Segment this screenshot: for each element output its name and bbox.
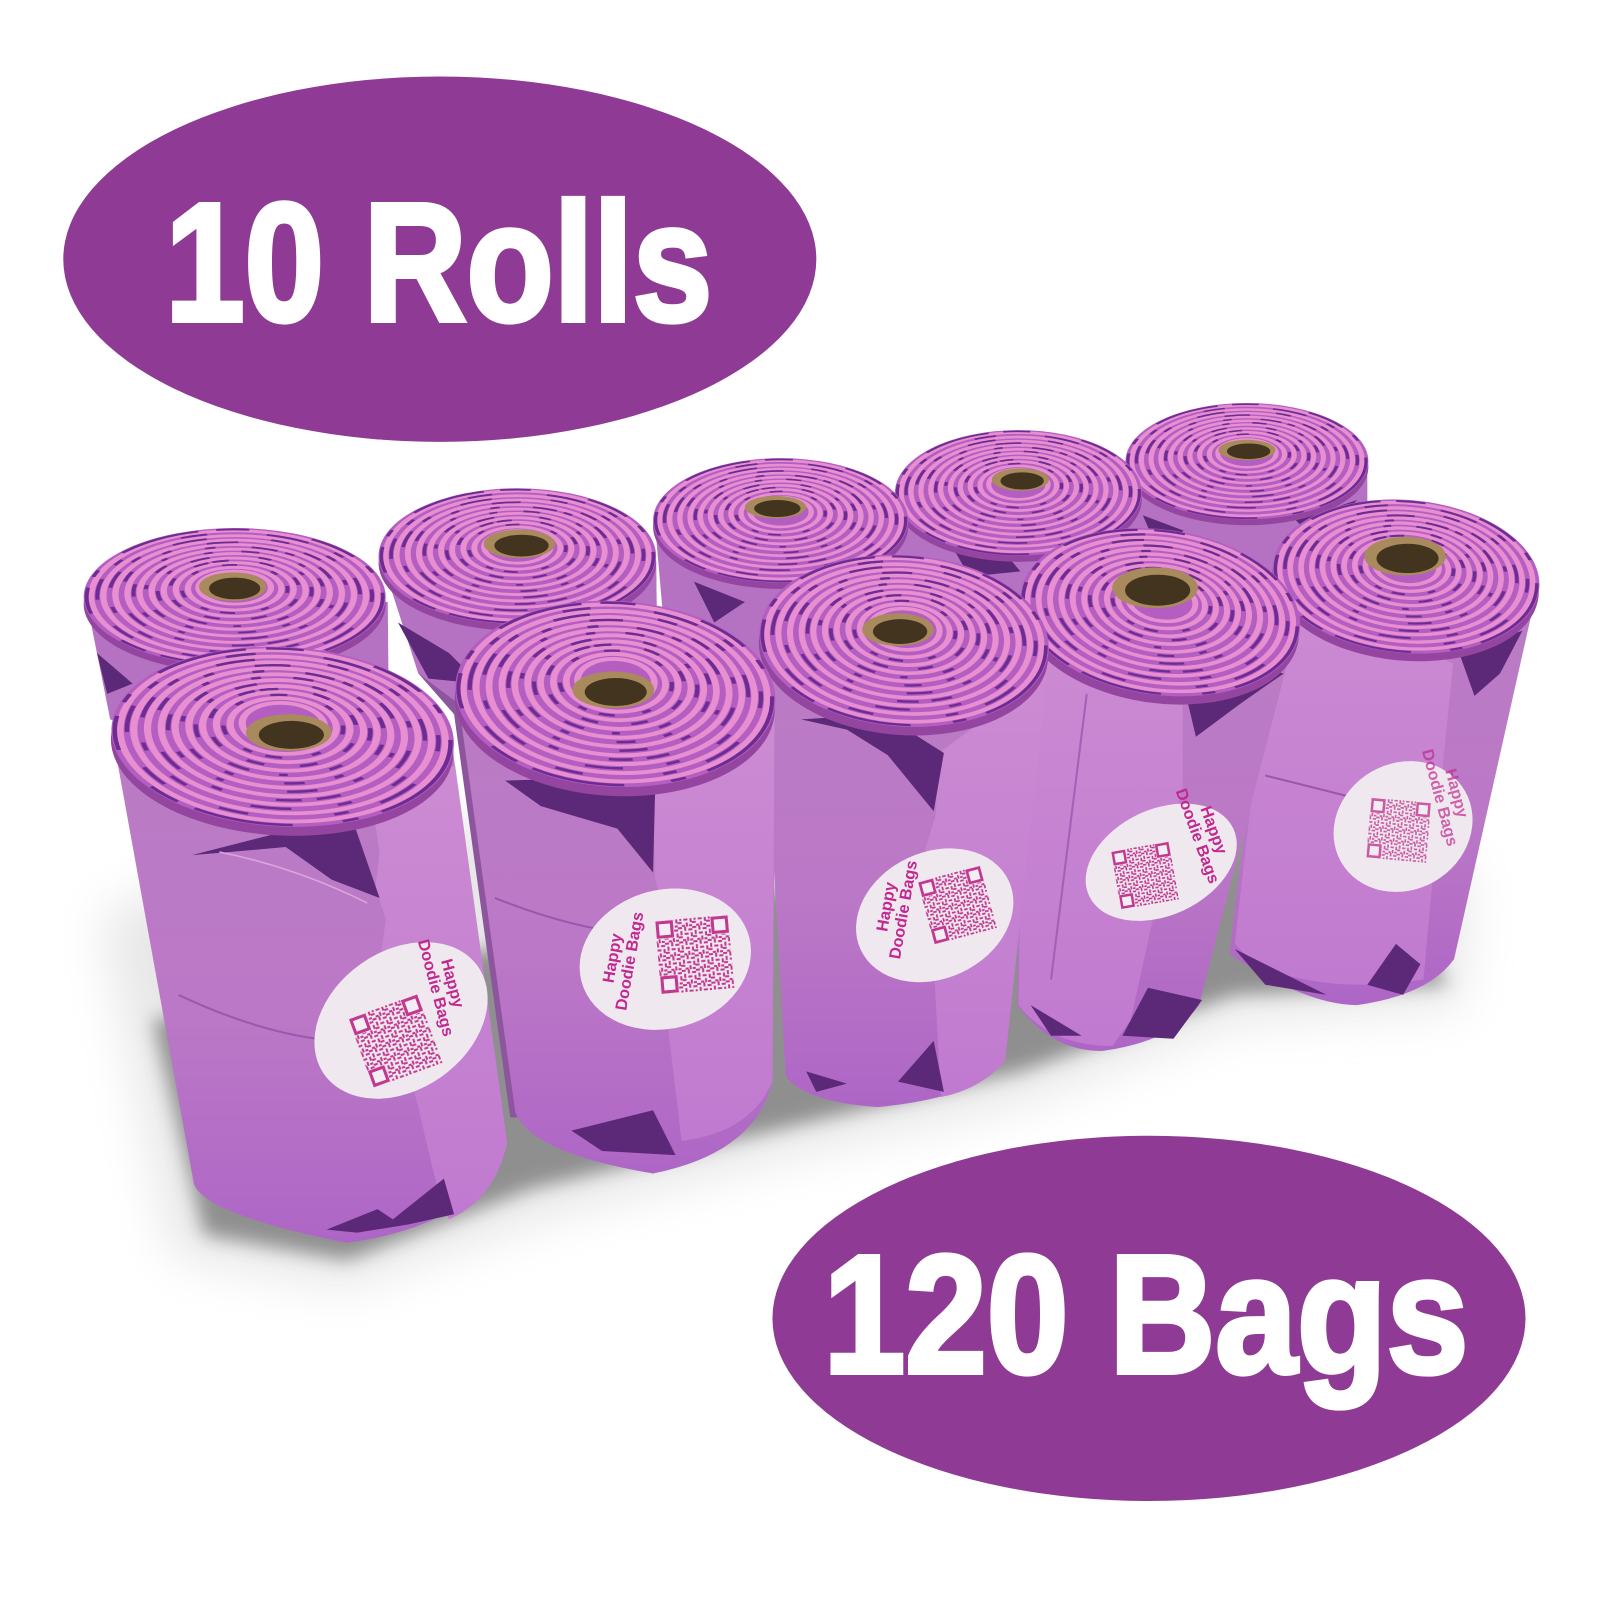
sticker: roll 3: Happy bbox=[873, 881, 900, 933]
badge: 10 Rolls: 10 Rolls bbox=[165, 168, 712, 356]
sticker: roll 3 bbox=[829, 814, 1035, 1007]
sticker: roll 4: Happy bbox=[1197, 804, 1230, 857]
table shadow bbox=[102, 816, 1469, 1286]
sticker: roll 4 bbox=[1064, 775, 1256, 944]
sticker: roll 1: Doodie Bags bbox=[414, 937, 457, 1038]
roll: front row 3 bbox=[703, 513, 1106, 1107]
badge: 120 Bags: 120 Bags bbox=[823, 1220, 1468, 1408]
sticker: roll 2: Doodie Bags bbox=[612, 911, 647, 1012]
roll: front row 2 bbox=[395, 559, 836, 1173]
sticker: roll 1: Happy bbox=[437, 957, 467, 1010]
sticker: roll 5: Happy bbox=[1441, 767, 1472, 820]
sticker: roll 3: Doodie Bags bbox=[886, 859, 921, 960]
photo: ten rolls of bags bbox=[33, 383, 1593, 1243]
sticker: roll 2 bbox=[564, 870, 767, 1049]
sticker: roll 4: Doodie Bags bbox=[1172, 786, 1223, 886]
badge: 10 Rolls bbox=[63, 77, 816, 442]
roll: back row 5 bbox=[1084, 383, 1409, 653]
sticker: roll 2: Happy bbox=[600, 932, 626, 984]
roll: back row 2 bbox=[332, 465, 703, 1117]
roll: front row 4 bbox=[958, 476, 1362, 1051]
roll: back row 1 bbox=[33, 505, 437, 816]
badge: 120 Bags bbox=[772, 1136, 1526, 1501]
roll: back row 4 bbox=[853, 409, 1184, 694]
sticker: roll 5 bbox=[1310, 730, 1508, 917]
sticker: roll 5: Doodie Bags bbox=[1418, 747, 1461, 848]
sticker: roll 1 bbox=[284, 910, 518, 1131]
roll: front row 1 bbox=[47, 605, 518, 1243]
roll: back row 3 bbox=[610, 437, 951, 735]
roll: front row 5 bbox=[1219, 459, 1593, 1005]
